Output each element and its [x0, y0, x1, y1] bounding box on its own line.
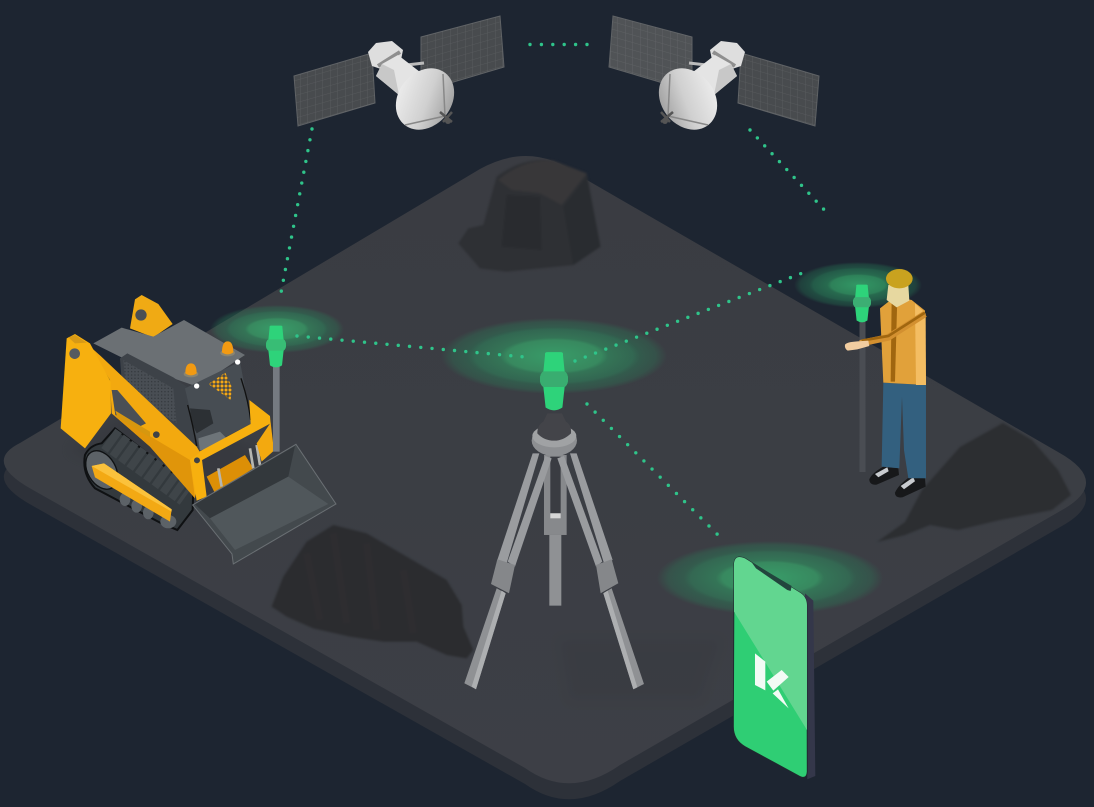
tripod [464, 413, 644, 689]
rover: surveyor [853, 285, 871, 322]
loader: pole [273, 367, 280, 452]
skid steer loader [61, 295, 336, 564]
loader: cab [93, 320, 252, 451]
platform [4, 156, 1086, 799]
satellite: right [609, 16, 819, 141]
phone: screen [733, 557, 807, 777]
loader: front frame [190, 400, 274, 501]
loader: rear lug [130, 295, 173, 337]
tripod: left leg [464, 453, 552, 689]
phone: notch [752, 562, 792, 591]
icon: k logo [755, 653, 789, 708]
smartphone [733, 557, 815, 779]
surveyor: head and hard hat [886, 269, 913, 307]
rover: loader [266, 326, 286, 367]
dotted signal links [280, 44, 830, 537]
phone: screen highlight [734, 557, 807, 730]
tripod: right leg [557, 453, 644, 689]
rock: right pile [877, 423, 1071, 542]
surveyor [845, 269, 926, 497]
rock: front left pile [272, 525, 473, 658]
rover: tripod [540, 352, 568, 410]
loader: track [79, 428, 193, 530]
signal glow: loader [210, 305, 344, 353]
surveyor: shoes [869, 467, 926, 497]
tripod: centre column [544, 455, 567, 606]
phone: side edge [805, 593, 815, 779]
surveyor: arm and hand [845, 313, 925, 351]
signal glow: phone [657, 541, 883, 615]
loader: side arm [61, 334, 202, 498]
surveyor: torso [880, 297, 926, 385]
surveyor pole [860, 320, 866, 472]
signal glow: surveyor [794, 262, 922, 308]
surveyor: trousers [882, 383, 926, 478]
rock: back boulder [458, 160, 601, 272]
satellite: left [294, 16, 504, 141]
loader: bucket [193, 444, 336, 564]
tripod: head [532, 413, 577, 456]
signal glow: tripod [441, 318, 667, 394]
